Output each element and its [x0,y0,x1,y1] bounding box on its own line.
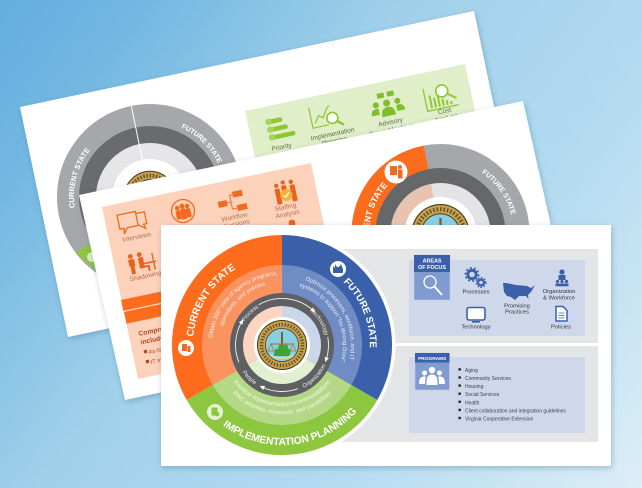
dark process ring: Process [242,306,258,322]
icon: processes gears [465,268,486,287]
icon: interviews [117,210,148,235]
peach panel labels: Staffing [274,202,298,213]
comprehensive list text: As-Is [148,347,162,356]
focus labels: Technology [461,324,491,330]
program list [458,368,566,423]
panel: gray backing bottom [340,346,598,442]
peach panel labels [122,202,301,283]
icon: cost analysis [423,82,459,111]
peach panel labels: Sessions [223,218,251,231]
icon: workflow [216,189,248,215]
panel: green planning tools [245,64,490,228]
focus labels: Processes [462,290,490,296]
program list: Social Services [465,392,500,398]
dark process ring: People [242,370,256,384]
peach panel labels: Interviews [122,231,152,244]
icon: shadowing [127,249,158,275]
icon: implementation planning [309,101,344,131]
program list: Client collaboration and integration guidelines [465,408,566,414]
program list: Health [465,400,480,406]
peach panel labels: Analysis [275,208,301,220]
focus labels [461,289,575,330]
program list: Housing [465,384,484,390]
middle wheel: CURRENT STATE [364,182,388,225]
middle wheel [352,144,530,225]
orange bars [121,288,182,311]
main wheel [172,235,396,456]
icon: organization [556,269,568,286]
icon: partial orange dot [289,220,295,226]
green panel labels [271,107,460,160]
back wheel [57,104,236,273]
icon: usa map [503,283,535,300]
green panel labels: Planning [322,135,348,148]
segment: future state [282,235,392,400]
icon: technology monitor [467,308,485,323]
segment: implementation planning: PWC priorities, resources, and capabilities [233,391,331,414]
focus labels: Practices [505,310,529,316]
panel: peach methods [102,163,347,379]
seal [254,317,310,373]
dark process ring: Technology [312,310,328,335]
dark process ring: Organization [302,364,326,388]
dark process ring [230,293,334,397]
program list: Virginia Cooperative Extension [465,417,534,423]
focus labels: Organization [543,289,575,295]
back wheel: CURRENT STATE [68,148,90,208]
icon: current state [178,340,194,356]
focus labels: Policies [551,324,571,330]
areas of focus header: OF FOCUS [418,265,446,271]
focus labels: & Workforce [543,296,575,302]
green panel labels: Analysis [434,112,460,124]
green panel labels: Advisory [378,116,404,129]
comprehensive list text: Comprehensive [138,320,190,338]
segment: current state: operations, and policies [220,282,265,326]
icon: implementation planning [207,404,223,420]
segment: future state: systems to support “No Wrong Door” [300,284,347,362]
panel: programs [409,353,585,433]
program list: Aging [465,368,478,374]
segment: current state: CURRENT STATE [186,263,236,336]
segment: implementation planning: Prioritize implementation recommendations [234,380,330,406]
comprehensive list text [138,320,191,366]
segment: implementation planning: IMPLEMENTATION PLANNING [223,408,356,445]
icon: priority setting [265,114,296,141]
icon: policies document [556,306,567,321]
middle wheel: FUTURE STATE [482,169,516,215]
segment: future state: FUTURE STATE [344,278,377,348]
green panel labels: Priority [271,142,293,153]
icon: advisory group meetings [368,89,406,119]
green panel labels: Cost [437,107,452,116]
back wheel: FUTURE STATE [182,124,222,163]
areas of focus header: AREAS [423,258,442,264]
panel: areas of focus [409,255,585,336]
icon: team circle [169,197,197,225]
green panel labels: Group Meetings [368,122,416,139]
panel: gray backing top [340,249,598,343]
segment: future state: Optimize processes, workforce, and IT [306,276,355,360]
peach panel labels: Shadowing [129,270,163,283]
segment: implementation planning [186,371,378,456]
green panel labels: Implementation [310,126,356,143]
comprehensive list text: includes: [140,333,171,346]
icon: staffing analysis [273,178,298,205]
back card: priorities [20,11,497,340]
areas of focus header [414,255,450,300]
segment: current state: Obtain 360° view of agency programs, [208,272,278,338]
segment: current state [172,235,282,400]
comprehensive list text: IT Infrastructure [150,352,191,366]
programs header [415,353,450,390]
middle card: current state [78,101,554,404]
icon: future state [330,261,346,277]
program list: Community Services [465,376,511,382]
icon: current state badge [384,160,408,184]
front card [158,224,615,471]
peach panel labels: Workflow [221,211,249,224]
green panel labels: Setting [274,149,296,160]
focus labels: Promising [504,304,530,310]
programs header: PROGRAMS [418,356,447,362]
